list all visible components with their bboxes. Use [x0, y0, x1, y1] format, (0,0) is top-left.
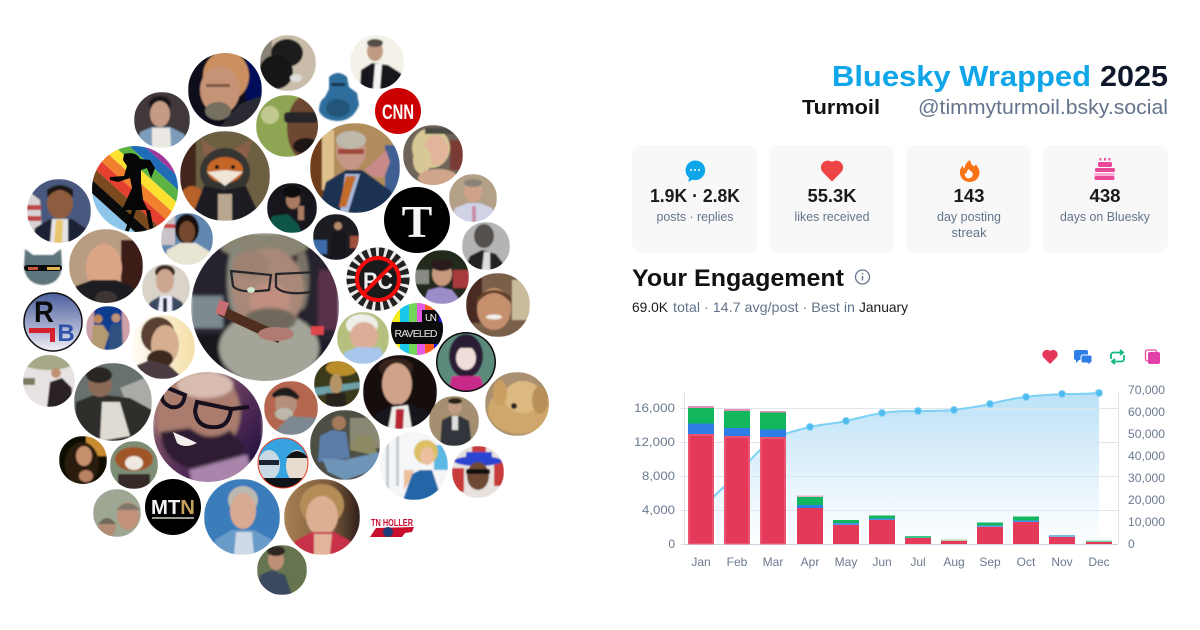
- avatar: golden retriever: [485, 372, 552, 436]
- user name: Turmoil: [802, 97, 880, 119]
- left axis labels: 8,000: [642, 469, 675, 483]
- avatar: woman in front of flag: [161, 213, 213, 265]
- avatar: hooded fox: [180, 131, 270, 221]
- avatar: man in dark jacket, light background: [350, 35, 404, 89]
- heading: your engagement: Your Engagement: [632, 265, 844, 292]
- avatar: CNN logo: [375, 88, 421, 134]
- avatar: RB logo: B: [57, 320, 75, 347]
- right axis labels: 50,000: [1128, 427, 1165, 441]
- avatar: bald man with goatee: [188, 51, 262, 127]
- title: 2025: [1100, 61, 1168, 93]
- avatar: grayscale man in suit: [462, 222, 510, 270]
- bars: Feb: [724, 409, 750, 544]
- avatar: senator pointing, orange tie: [310, 123, 400, 213]
- right axis labels: 10,000: [1128, 515, 1165, 529]
- chart legend: [1043, 350, 1160, 365]
- avatar: dark-haired man in jacket: [74, 363, 152, 441]
- avatar: RB logo: [24, 293, 82, 351]
- bars: Dec: [1086, 540, 1112, 544]
- avatar: bald man in dark shirt: [69, 229, 143, 305]
- avatar: man in beanie by brick wall: [264, 381, 318, 435]
- stat value: 438: [1090, 186, 1120, 206]
- avatar: smiling bald man with dark glasses: [153, 372, 263, 482]
- icon: replies chat: [1074, 350, 1092, 365]
- month labels: Sep: [979, 555, 1001, 569]
- left axis labels: 12,000: [634, 435, 675, 449]
- avatar: white-haired man with glasses: [337, 312, 389, 364]
- avatar: woman in green dress: [267, 183, 317, 233]
- right axis labels: 0: [1128, 537, 1135, 551]
- right axis labels: 30,000: [1128, 471, 1165, 485]
- month labels: Nov: [1051, 555, 1073, 569]
- panel: avatar bubble cluster: [22, 35, 552, 595]
- engagement summary: [632, 299, 908, 315]
- avatar: red panda: [110, 441, 158, 489]
- panel: days on Bluesky: [1043, 145, 1168, 253]
- left axis labels: 0: [668, 537, 675, 551]
- chart: monthly engagement bars and cumulative line: [634, 383, 1165, 569]
- month labels: Jun: [872, 555, 892, 569]
- avatar: man in blue blazer: [134, 92, 190, 148]
- avatar: man in suit with yellow tie: [27, 179, 91, 243]
- month labels: May: [835, 555, 857, 569]
- avatar: blue armored helmet figure: [319, 73, 359, 121]
- stat label: day posting: [937, 210, 1001, 224]
- bars: Oct: [1013, 516, 1039, 544]
- avatar: black dog: [259, 35, 316, 91]
- icon: chat bubble: [686, 160, 705, 182]
- avatar: woman with glasses in red jacket: [284, 479, 360, 555]
- avatar: man in sunglasses, foliage: [256, 95, 318, 157]
- logo: TN Holler: TN HOLLER: [371, 518, 414, 529]
- avatar: bearded man with glasses: [131, 315, 195, 379]
- stat label: likes received: [794, 210, 870, 224]
- stat label: streak: [952, 226, 987, 240]
- icon: birthday cake: [1094, 158, 1115, 180]
- engagement summary: total · 14.7 avg/post · Best in: [673, 299, 855, 315]
- bars: Sep: [977, 522, 1003, 544]
- avatar: main user, man with cigar and grey beard: [191, 233, 339, 384]
- panel: day posting streak: [906, 145, 1031, 253]
- line markers: [806, 390, 1102, 430]
- user handle: @timmyturmoil.bsky.social: [918, 97, 1168, 119]
- right axis labels: 40,000: [1128, 449, 1165, 463]
- right axis labels: 20,000: [1128, 493, 1165, 507]
- bars: Mar: [760, 411, 786, 544]
- avatar: New York Times logo: [384, 187, 450, 253]
- avatar: MTN logo: [145, 479, 201, 535]
- avatar: No PC logo: [346, 247, 410, 311]
- bars: Aug: [941, 540, 967, 544]
- month labels: Oct: [1017, 555, 1036, 569]
- engagement summary: January: [859, 299, 908, 315]
- stat value: 55.3K: [808, 186, 856, 206]
- avatar: young man in suit: [142, 264, 190, 312]
- right axis labels: 60,000: [1128, 405, 1165, 419]
- stat label: [937, 210, 1001, 240]
- left axis labels: 4,000: [642, 503, 675, 517]
- panel: posts and replies: [632, 145, 757, 253]
- avatar: blue masked faces: [258, 438, 308, 488]
- avatar: smiling man on blue: [204, 479, 280, 555]
- icon: heart: [822, 162, 842, 180]
- avatar: goth girl illustration: [436, 332, 496, 392]
- right axis labels: [1128, 383, 1165, 551]
- avatar: young man, city at night: [415, 250, 469, 304]
- avatar: doge warrior: [314, 360, 360, 407]
- avatar: man in grey suit, stone wall: [429, 396, 479, 446]
- avatar: older couple selfie: [93, 489, 141, 537]
- stat value: 143: [954, 186, 984, 206]
- logo: TN Holler: [370, 518, 414, 537]
- month labels: Apr: [801, 555, 819, 569]
- icon: info: [856, 270, 870, 284]
- avatar: blonde woman: [403, 125, 463, 187]
- bars: Jul: [905, 536, 931, 544]
- bars: Nov: [1049, 535, 1075, 544]
- avatar: man on stage: [313, 214, 359, 260]
- bars: Jun: [869, 516, 895, 544]
- avatar: RB logo: R: [34, 296, 54, 329]
- avatar: muscular man in helicopter: [310, 410, 380, 480]
- avatar: MTN logo: MTN: [151, 497, 195, 519]
- avatar: man outdoors: [257, 545, 307, 595]
- title: Bluesky Wrapped: [832, 61, 1091, 93]
- right axis labels: 70,000: [1128, 383, 1165, 397]
- month labels: Jul: [910, 555, 926, 569]
- stat label: posts · replies: [656, 210, 734, 224]
- avatar: CNN logo: CNN: [382, 101, 414, 124]
- month labels: Feb: [727, 555, 748, 569]
- icon: reposts: [1111, 350, 1124, 364]
- avatar: two people shaking hands: [86, 306, 130, 350]
- avatar: Unraveled logo: RAVELED: [394, 328, 438, 340]
- cumulative line: [701, 393, 1099, 509]
- left axis labels: 16,000: [634, 401, 675, 415]
- month labels: [691, 555, 1110, 569]
- month labels: Mar: [763, 555, 783, 569]
- avatar: cat with rainbow glasses: [24, 249, 62, 285]
- avatar: man in patriotic hat: [452, 446, 504, 498]
- bars: May: [833, 520, 859, 544]
- avatar: man by lake: [22, 354, 75, 407]
- cumulative area: [701, 393, 1099, 544]
- bars: Jan: [688, 406, 714, 544]
- month labels: Aug: [943, 555, 965, 569]
- bars: Apr: [797, 496, 823, 544]
- stat value: 1.9K · 2.8K: [650, 186, 740, 206]
- avatar: No PC logo: PC: [363, 268, 393, 295]
- stat label: days on Bluesky: [1060, 210, 1151, 224]
- avatar: Unraveled logo: [391, 303, 443, 355]
- gridlines and axes: [680, 391, 1118, 544]
- avatar: Unraveled logo: UN: [425, 313, 437, 324]
- avatar: smiling man, warm interior: [466, 273, 530, 337]
- month labels: Dec: [1088, 555, 1110, 569]
- avatar: smiling man, pink tie: [449, 174, 497, 222]
- panel: likes received: [769, 145, 894, 253]
- avatar: woman with long hair: [59, 436, 107, 486]
- avatar: man in suit, red tie, dark background: [363, 355, 437, 429]
- icon: likes heart: [1043, 351, 1057, 363]
- month labels: Jan: [691, 555, 711, 569]
- icon: flame: [960, 160, 980, 182]
- engagement summary: 69.0K: [632, 299, 669, 315]
- avatar: New York Times logo: T: [402, 196, 432, 247]
- avatar: rainbow stripes with silhouette: [92, 146, 178, 232]
- icon: quotes: [1146, 350, 1160, 364]
- avatar: comic blonde woman in blue dress: [380, 432, 448, 500]
- left axis labels: [634, 401, 675, 551]
